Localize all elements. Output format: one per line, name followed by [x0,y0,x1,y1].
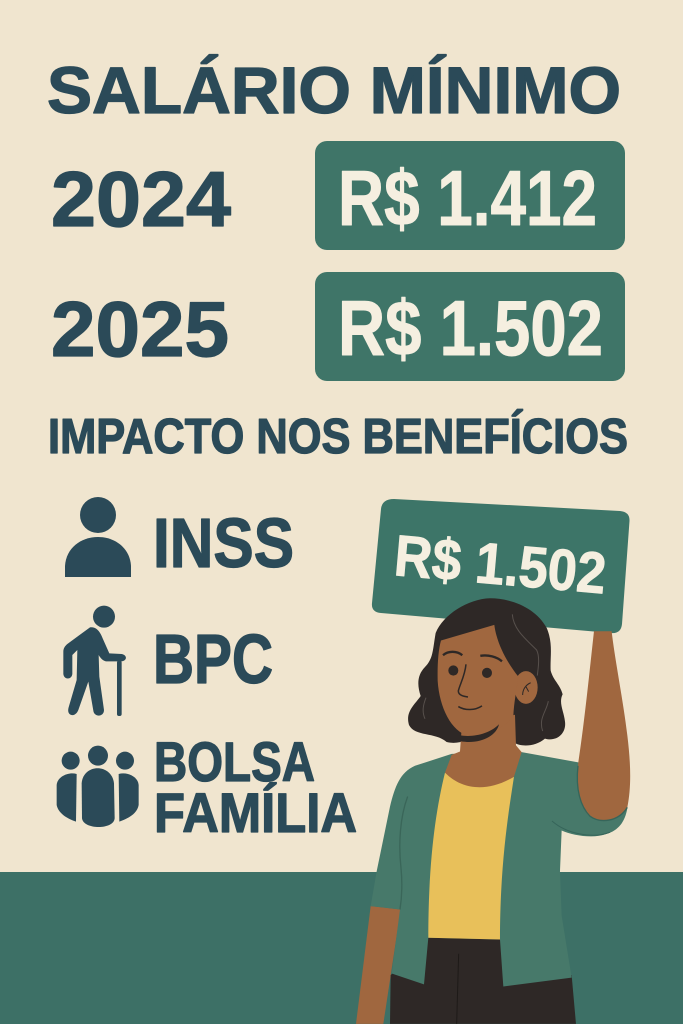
trousers [390,936,576,1024]
sign held overhead [372,499,630,633]
hair strands [423,614,548,731]
year label 2024: 2024 [51,155,231,243]
face [438,625,518,736]
sleeve fold line [552,821,610,835]
year row 2024 [51,141,625,250]
value box 2025: R$ 1.502 [338,284,603,372]
neck [445,715,522,787]
sign held overhead: R$ 1.502 [392,523,609,606]
left arm [356,906,401,1024]
benefit: INSS [65,497,294,582]
label Bolsa Família: FAMÍLIA [154,781,357,844]
eyes [448,665,492,678]
label INSS: INSS [153,504,294,582]
ear detail [523,683,531,695]
label BPC: BPC [153,620,273,698]
icon: elderly person with cane [63,606,126,716]
hair [408,598,565,745]
icon: person [65,497,131,577]
jaw shadow [459,724,499,742]
label Bolsa Família: BOLSA [154,730,315,793]
bottom green band [0,872,683,1024]
year row 2025 [51,272,625,381]
brows [443,652,502,661]
mouth [458,706,482,710]
woman holding sign [356,499,630,1024]
arm shadow edge [577,766,627,821]
cardigan fold line [400,796,408,909]
trouser seam [457,954,459,1024]
ear [514,671,538,704]
figure illustration [356,598,630,1024]
nose [458,664,468,697]
icon: family group [57,746,139,827]
yellow shirt [428,773,514,939]
year label 2025: 2025 [51,285,229,373]
benefit: BPC [63,606,273,716]
value box 2024 [315,141,625,250]
raised arm [578,631,630,820]
value box 2025 [315,272,625,381]
title: SALÁRIO MÍNIMO [47,53,621,127]
cardigan [371,752,627,986]
label Bolsa Família [154,730,357,844]
section heading: IMPACTO NOS BENEFÍCIOS [48,410,628,464]
value box 2024: R$ 1.412 [338,154,597,242]
benefit: Bolsa Família [57,730,357,844]
